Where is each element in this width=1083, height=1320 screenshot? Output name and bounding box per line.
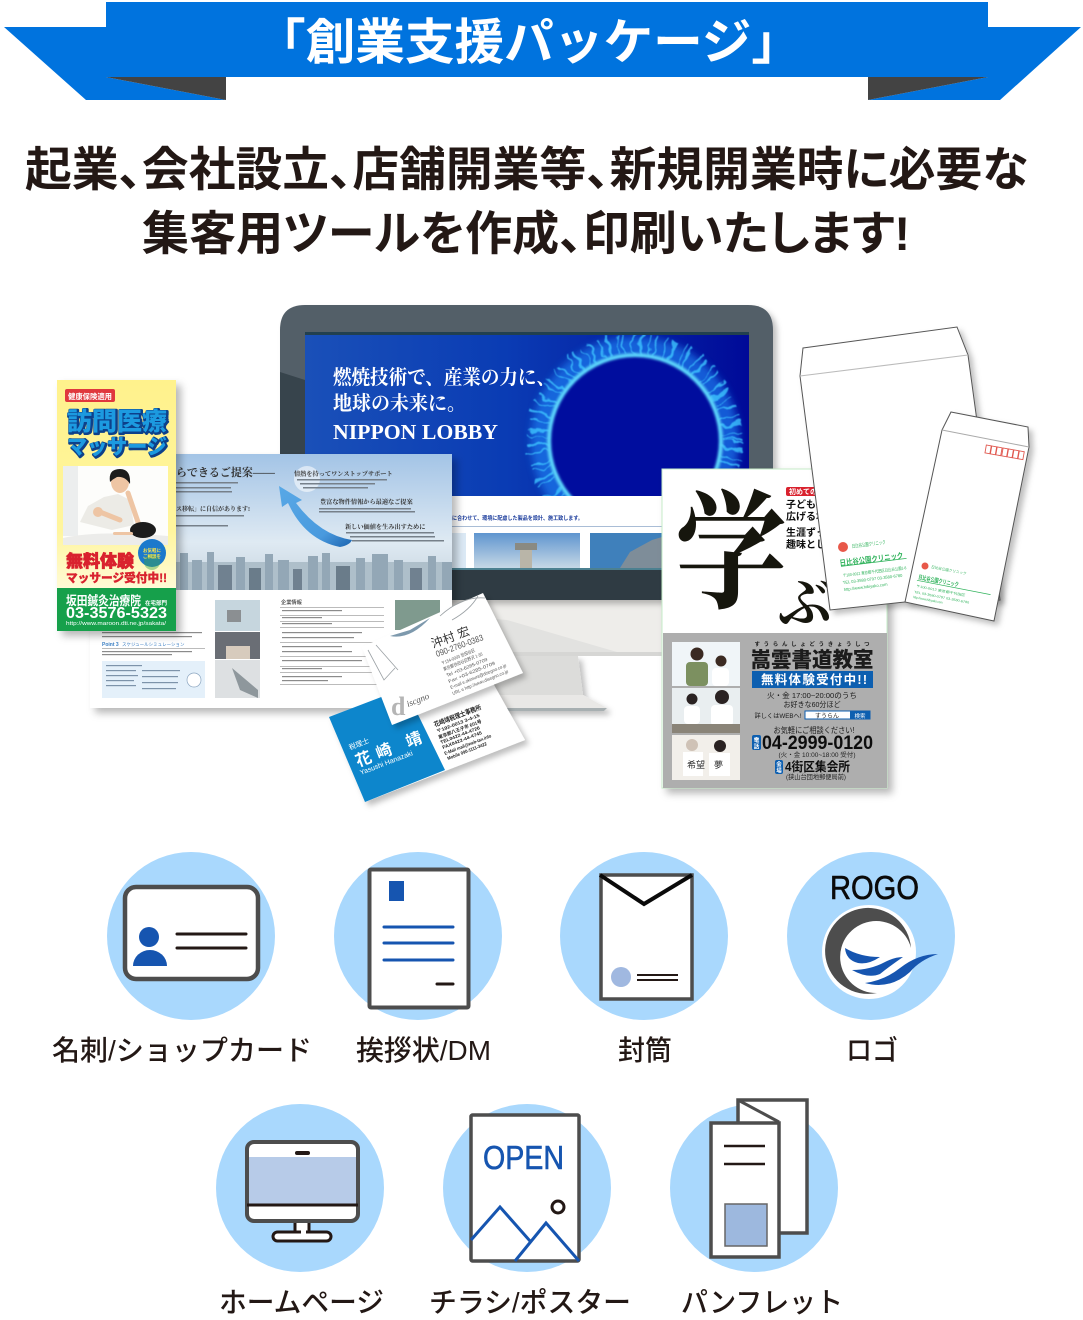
card logo: d: [391, 692, 406, 721]
card name and contact: 〒154-0003 世田谷区: [440, 647, 476, 667]
ribbon right fold: [868, 77, 988, 100]
envelope clinic print: [838, 539, 907, 592]
leaflet headline: マッサージ: [68, 437, 168, 460]
poster brush calligraphy: [675, 484, 832, 634]
leaflet headline: [67, 408, 168, 460]
ribbon left fold: [106, 77, 226, 100]
poster brush calligraphy: ぶ: [778, 574, 832, 634]
white business card: [362, 593, 523, 725]
label: 封筒: [618, 1035, 672, 1066]
monitor bezel lower shade: [280, 372, 665, 600]
brochure left column: [102, 632, 205, 698]
circle background: [670, 1104, 838, 1272]
website copy: NIPPON LOBBY: [333, 420, 498, 444]
ribbon left wing: [4, 27, 226, 100]
card logo: iscgno: [405, 691, 431, 709]
brochure headings: 新しい価値を生み出すために: [345, 523, 425, 531]
banner title: 「創業支援パッケージ」: [256, 16, 801, 70]
card name and contact: URL e http://www.disegno.co.jp: [452, 669, 509, 696]
poster class info: 嵩雲書道教室: [750, 648, 874, 672]
brochure headings: 豊富な物件情報から最適なご提案: [320, 498, 414, 506]
card name and contact: E-mail e.okimura@disegno.co.jp: [450, 663, 507, 690]
leaflet free trial copy: マッサージ受付中!!: [66, 570, 167, 585]
poster photos: 希望: [687, 759, 705, 770]
brochure arrow swoosh: [279, 466, 352, 547]
poster venue: 4街区集会所: [785, 759, 850, 774]
poster phone number: (火・金 10:00~18:00 受付): [778, 751, 856, 759]
card name and contact: Fax +03-6285-0709: [448, 660, 496, 684]
poster photos: 夢: [714, 759, 723, 770]
poster top copy: 趣味として: [786, 538, 836, 551]
flame ring: [538, 344, 732, 538]
brochure sky image: [176, 454, 452, 590]
card office details: E-Mail mail@web-tax.info: [444, 733, 492, 756]
leaflet green footer: 坂田鍼灸治療院: [66, 593, 141, 608]
blue business card: [329, 660, 525, 802]
card name and contact: 090-2760-0383: [434, 632, 485, 659]
ribbon centre: [106, 2, 988, 77]
brochure headings: 情熱を持ってワンストップサポート: [294, 470, 393, 478]
service: pamphlet: [670, 1100, 843, 1318]
website copy: 燃焼技術で、産業の力に、: [332, 366, 555, 389]
circle background: [787, 852, 955, 1020]
card logo: [391, 691, 431, 721]
poster venue: 会: [776, 760, 782, 768]
card name and contact: 沖村 宏: [429, 624, 472, 651]
brochure company table: [280, 598, 384, 685]
website hero image: [305, 332, 749, 496]
leaflet globe badge: お気軽に: [143, 547, 161, 554]
leaflet headline: 訪問医療: [67, 408, 167, 436]
service: business card: [52, 852, 312, 1066]
poster class info: 詳しくはWEBへ!: [754, 712, 802, 720]
poster class info: 無料体験受付中!!: [761, 672, 867, 687]
service: envelope: [560, 852, 728, 1066]
service: flyer and poster: [429, 1104, 631, 1318]
poster venue: [775, 759, 850, 781]
website content band: に合わせて、環境に配慮した製品を設計、施工致します。: [452, 514, 583, 522]
calligraphy class poster: [662, 469, 887, 788]
circle background: [443, 1104, 611, 1272]
monitor chin: [280, 598, 665, 656]
poster phone number: 話: [754, 742, 760, 750]
monitor stand: [440, 656, 607, 711]
icon: letter: [370, 870, 468, 1008]
card name: 花崎 靖: [353, 728, 425, 771]
leaflet free trial copy: 無料体験: [66, 551, 134, 571]
poster class info: 検索: [854, 712, 866, 720]
poster class info: 火・金 17:00~20:00のうち: [767, 690, 857, 700]
main heading: [25, 143, 1028, 260]
envelope flap fold: [800, 355, 968, 376]
leaflet headline: 訪問医療: [68, 409, 168, 437]
card name and contact: 東京都世田谷区野沢 1-36: [442, 650, 484, 673]
card office details: TEL0422-44-4726: [440, 725, 481, 745]
brochure spread: [90, 454, 452, 708]
leaflet globe badge: ご相談を: [143, 553, 161, 560]
icon: monitor: [247, 1142, 358, 1241]
poster top copy: [786, 487, 836, 551]
label: 挨拶状/DM: [356, 1035, 491, 1066]
card sketch decoration: [368, 596, 485, 680]
circle background: [107, 852, 275, 1020]
label: パンフレット: [681, 1287, 843, 1318]
envelope clinic print: http://www.hibiyako.com: [844, 582, 888, 592]
poster top copy: 広げる場: [786, 510, 826, 523]
poster venue: 場: [776, 766, 782, 774]
circle background: [216, 1104, 384, 1272]
small envelope clinic print: 日比谷公園クリニック: [918, 573, 959, 589]
card office details: 東京都八王子市 601号: [437, 718, 483, 741]
leaflet green footer: [57, 588, 176, 631]
website content band: [305, 496, 665, 570]
envelope clinic print: 日比谷公園クリニック: [839, 550, 904, 568]
card name: Yasushi Hanazaki: [359, 750, 414, 777]
brochure headings: [176, 465, 425, 531]
label: ロゴ: [846, 1035, 898, 1066]
small envelope clinic print: 日比谷公園クリニック: [931, 564, 967, 576]
leaflet green footer: 在宅部門: [145, 599, 167, 607]
desktop monitor mockup: [280, 305, 773, 711]
poster class info: すうらんしょどうきょうしつ: [754, 640, 870, 648]
leaflet green footer: 03-3576-5323: [66, 605, 167, 622]
small envelope clinic print: 〒100-0012 東京都千代田区: [916, 583, 967, 598]
small envelope clinic print: http://www.hibiyako.com: [913, 595, 943, 605]
card office details: 〒192-0013 3-4-15: [436, 713, 481, 734]
leaflet badge: [65, 389, 115, 402]
poster top copy: 子ども達: [786, 498, 826, 511]
poster phone number: 電: [754, 737, 760, 744]
poster top copy: 初めての: [789, 487, 817, 496]
circle background: [334, 852, 502, 1020]
icon: poster: [471, 1115, 579, 1261]
label: チラシ/ポスター: [429, 1287, 631, 1318]
heading line 1: 起業、会社設立、店舗開業等、新規開業時に必要な: [25, 143, 1028, 196]
brochure headings: ス移転」に自信があります!: [176, 505, 250, 513]
card office details: FAX0422-44-4745: [442, 730, 483, 750]
icon: folded pamphlet: [711, 1100, 807, 1257]
card office details: 花崎靖税理士事務所: [432, 702, 483, 729]
leaflet: visiting massage: [57, 380, 176, 631]
brochure skyline: [176, 552, 452, 590]
ribbon right wing: [868, 27, 1081, 100]
small envelope flap fold: [942, 430, 1029, 447]
heading line 2: 集客用ツールを作成、印刷いたします!: [142, 207, 910, 260]
small envelope clinic print: TEL 03-3580-0797 03-3580-6780: [914, 590, 970, 605]
service: homepage: [216, 1104, 384, 1318]
service: logo: [787, 852, 955, 1066]
hero product collage: [57, 305, 1029, 802]
postal code boxes: [985, 445, 1024, 460]
icon: envelope: [600, 875, 692, 999]
card blue panel: [329, 688, 445, 802]
card office details: [432, 702, 492, 761]
brochure company table: 企業情報: [281, 598, 303, 606]
card office details: Mobile 090-1111-3422: [447, 741, 488, 761]
leaflet photo: [63, 466, 168, 545]
envelope clinic print: 日比谷公園クリニック: [851, 539, 886, 550]
card name and contact: Tel +03-6285-0709: [446, 657, 489, 678]
service: greeting card and DM: [334, 852, 502, 1066]
brochure headings: らできるご提案――: [176, 465, 276, 479]
poster photos: [672, 642, 740, 780]
leaflet headline: マッサージ: [67, 436, 167, 459]
poster class info: [750, 640, 874, 735]
website copy: 地球の未来に。: [333, 392, 466, 415]
poster top copy: 生涯ずっと: [786, 526, 836, 539]
poster grey panel: [663, 633, 887, 788]
circle background: [560, 852, 728, 1020]
leaflet green footer: http://www.maroon.dti.ne.jp/sakata/: [66, 621, 167, 627]
small envelope clinic print: [913, 562, 991, 605]
card name and contact: [429, 624, 509, 696]
leaflet free trial copy: [66, 551, 167, 585]
label: ホームページ: [219, 1287, 384, 1318]
brochure lower photos: [215, 600, 440, 698]
large envelope: [800, 327, 1000, 610]
poster class info: すうらん: [815, 713, 839, 720]
icon: logo: ROGO: [830, 869, 919, 906]
leaflet badge: 健康保険適用: [68, 391, 112, 401]
card name: 税理士: [347, 736, 370, 752]
icon: logo: [822, 869, 938, 999]
icon: business card: [125, 887, 258, 979]
envelope clinic print: TEL 03-3580-0797 03-3580-6780: [843, 573, 903, 585]
small envelope: [905, 412, 1029, 621]
icon: poster: OPEN: [483, 1139, 564, 1176]
brochure body copy marks: [176, 479, 444, 542]
poster class info: お好きな60分ほど: [784, 699, 841, 709]
poster brush calligraphy: 学: [675, 484, 787, 627]
banner ribbon: [4, 2, 1081, 100]
poster class info: お気軽にご相談ください!: [774, 725, 854, 735]
brochure left column: Point 3: [102, 642, 119, 648]
website copy: [332, 366, 555, 444]
leaflet globe badge: [138, 539, 166, 570]
poster phone number: 04-2999-0120: [762, 733, 873, 754]
monitor bezel: [280, 305, 773, 600]
label: 名刺/ショップカード: [52, 1035, 312, 1066]
envelope clinic print: 〒100-0012 東京都千代田区日比谷公園1-6: [842, 564, 907, 579]
brochure left column: スケジュールシミュレーション: [122, 641, 185, 648]
poster venue: (狭山台団地郵便局前): [786, 772, 846, 781]
